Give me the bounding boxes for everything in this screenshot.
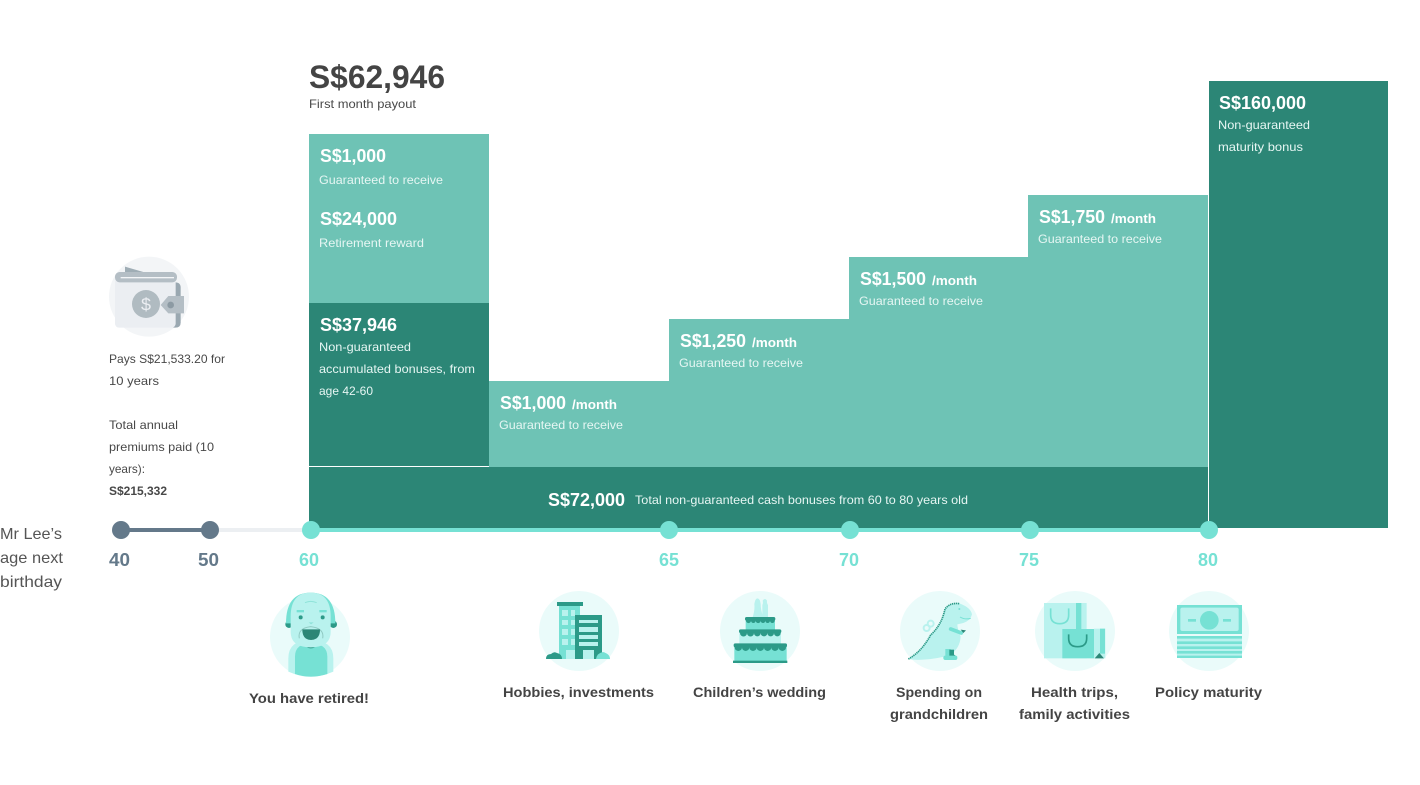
icon: retired man: [270, 593, 350, 677]
timeline axis: 70: [839, 550, 859, 570]
panel: S$1,000 per month: Guaranteed to receive: [499, 418, 623, 432]
caption: you have retired: You have retired!: [249, 690, 369, 706]
headline: first month payout: S$62,946: [309, 59, 445, 95]
panel: S$1,500 per month: [849, 257, 1029, 467]
text: premium details: S$215,332: [109, 484, 167, 498]
text: premium details: premiums paid (10: [109, 440, 214, 454]
text: axis title: age next: [0, 550, 64, 567]
icon: toy dinosaur: [900, 591, 980, 671]
icon: wallet: $: [141, 294, 151, 314]
panel: age 60 guaranteed and retirement reward: Retirement reward: [319, 236, 424, 250]
text: axis title: birthday: [0, 574, 62, 591]
panel: accumulated bonuses: accumulated bonuses, from: [319, 362, 475, 376]
text: axis title: Mr Lee’s: [0, 526, 62, 543]
panel: maturity bonus: maturity bonus: [1218, 140, 1303, 154]
caption: hobbies: Hobbies, investments: [503, 684, 654, 700]
panel: accumulated bonuses: S$37,946: [320, 315, 397, 335]
panel: total cash bonuses: Total non-guaranteed cash bonuses from 60 to 80 years old: [635, 493, 968, 507]
panel: S$1,500 per month: Guaranteed to receive: [859, 294, 983, 308]
timeline axis: 50: [198, 550, 219, 570]
icon: wallet: [109, 257, 189, 337]
panel: S$1,250 per month: [669, 319, 849, 467]
caption: policy maturity: Policy maturity: [1155, 684, 1262, 700]
timeline axis: 75: [1019, 550, 1039, 570]
panel: S$1,500 per month: S$1,500: [860, 269, 926, 289]
panel: S$1,750 per month: [1028, 195, 1208, 467]
headline: first month payout: First month payout: [309, 97, 417, 111]
timeline axis: 65: [659, 550, 679, 570]
caption: wedding: Children’s wedding: [693, 684, 826, 700]
panel: S$1,250 per month: /month: [752, 336, 797, 350]
panel: S$1,750 per month: Guaranteed to receive: [1038, 232, 1162, 246]
icon: stack of money: [1169, 591, 1249, 671]
panel: accumulated bonuses: age 42-60: [319, 384, 373, 398]
panel: age 60 guaranteed and retirement reward: S$24,000: [320, 209, 397, 229]
caption: grandchildren: Spending on: [896, 684, 982, 700]
caption: grandchildren: [890, 684, 988, 722]
panel: maturity bonus: Non-guaranteed: [1218, 118, 1310, 132]
panel: maturity bonus: S$160,000: [1219, 93, 1306, 113]
text: axis title: [0, 526, 64, 591]
panel: S$1,750 per month: S$1,750: [1039, 207, 1105, 227]
text: premium details: years):: [109, 462, 145, 476]
panel: maturity bonus: [1209, 81, 1388, 528]
panel: S$1,250 per month: Guaranteed to receive: [679, 356, 803, 370]
timeline axis: 60: [299, 550, 319, 570]
caption: grandchildren: grandchildren: [890, 706, 988, 722]
text: premium details: [109, 352, 225, 498]
panel: S$1,500 per month: /month: [932, 274, 977, 288]
panel: total cash bonuses: S$72,000: [548, 490, 625, 510]
panel: total cash bonuses: [309, 467, 1208, 528]
text: premium details: 10 years: [109, 374, 159, 388]
headline: first month payout: [309, 59, 445, 111]
timeline axis: 80: [1198, 550, 1218, 570]
panel: accumulated bonuses: Non-guaranteed: [319, 340, 411, 354]
timeline axis: [109, 466, 1218, 570]
panel: age 60 guaranteed and retirement reward: Guaranteed to receive: [319, 173, 443, 187]
icon: office buildings: [539, 591, 619, 671]
panel: age 60 guaranteed and retirement reward: [309, 134, 489, 303]
caption: health trips: Health trips,: [1031, 684, 1118, 700]
timeline axis: 40: [109, 550, 130, 570]
text: premium details: Pays S$21,533.20 for: [109, 352, 225, 366]
text: premium details: Total annual: [109, 418, 178, 432]
panel: S$1,000 per month: /month: [572, 398, 617, 412]
panel: S$1,750 per month: /month: [1111, 212, 1156, 226]
caption: health trips: family activities: [1019, 706, 1130, 722]
icon: wedding cake: [720, 591, 800, 671]
panel: S$1,250 per month: S$1,250: [680, 331, 746, 351]
panel: S$1,000 per month: S$1,000: [500, 393, 566, 413]
panel: accumulated bonuses: [309, 303, 489, 466]
icon: shopping bags: [1035, 591, 1115, 671]
panel: age 60 guaranteed and retirement reward: S$1,000: [320, 146, 386, 166]
panel: S$1,000 per month: [489, 381, 669, 467]
caption: health trips: [1019, 684, 1130, 722]
